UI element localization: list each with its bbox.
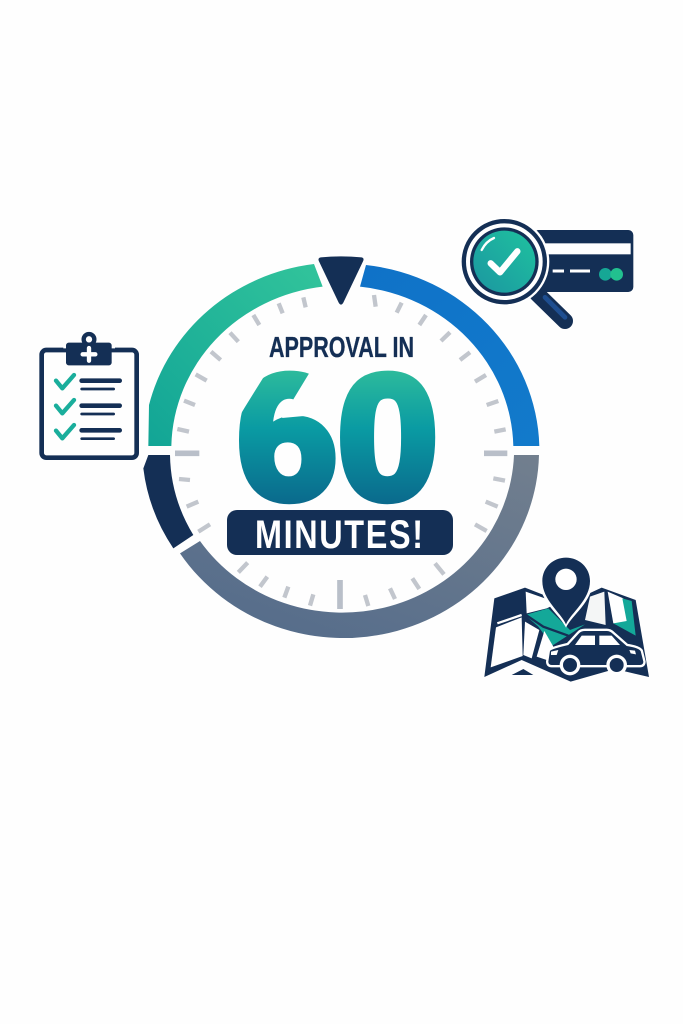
- heading: approval in: APPROVAL IN: [269, 332, 414, 364]
- arc segment: gray: [180, 455, 539, 638]
- clock dial: [143, 256, 539, 638]
- badge background: [227, 510, 453, 555]
- car: [548, 631, 643, 675]
- numeral trim: straight six: [230, 362, 337, 432]
- icon: clipboard checklist: [42, 334, 137, 458]
- card: [533, 230, 633, 292]
- minutes badge: [227, 510, 453, 557]
- location pin: [540, 555, 593, 628]
- icon: credit card under magnifier: [459, 217, 633, 321]
- icon: map with pin and car: [484, 555, 649, 682]
- clipboard clip: [66, 334, 112, 365]
- tick marks: [175, 295, 507, 609]
- big number 60: 60: [237, 340, 438, 536]
- magnifier: [459, 217, 565, 321]
- top pointer: [318, 256, 364, 305]
- folded map: [484, 588, 649, 682]
- arc segment: teal: [148, 264, 323, 446]
- arc segment: blue: [360, 265, 539, 446]
- infographic canvas: [39, 219, 649, 682]
- clipboard board: [42, 350, 137, 458]
- badge text: MINUTES!: [255, 512, 425, 557]
- checklist rows: [56, 375, 120, 439]
- arc segment: navy: [143, 455, 193, 548]
